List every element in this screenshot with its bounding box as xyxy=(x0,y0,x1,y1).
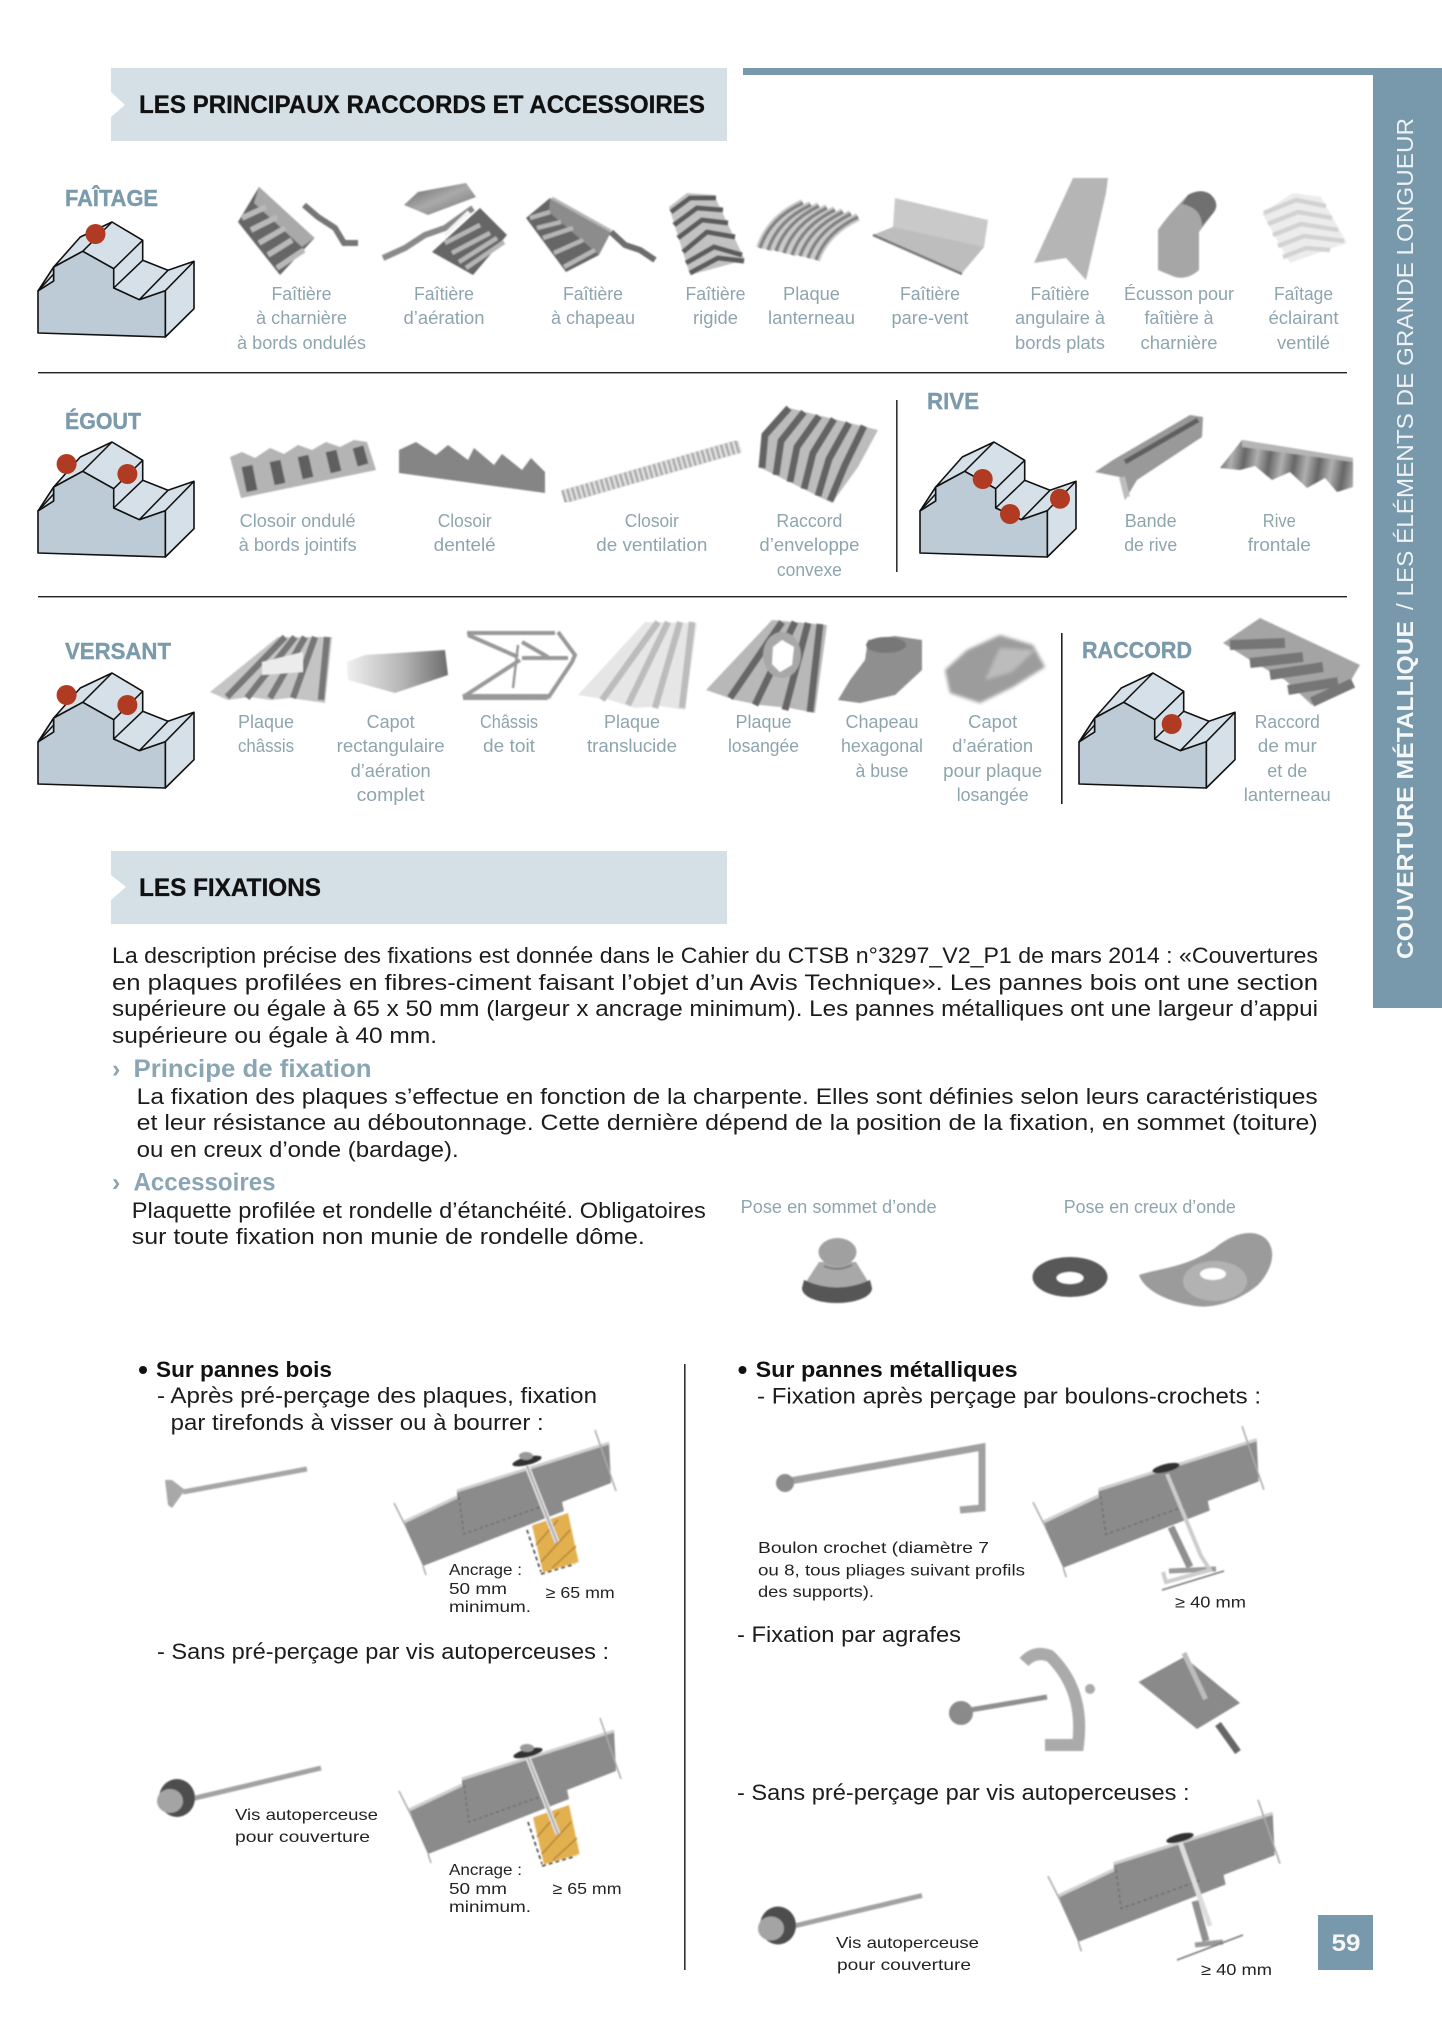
label: boulon crochet xyxy=(758,1540,1025,1601)
text block: introduction: La description précise des fixations est donnée dans le Cahier du CTSB n°3297_V2_P1 de mars 2014 : «Couvertures xyxy=(112,943,1318,968)
text: fixation après perçage: - Fixation après perçage par boulons-crochets : xyxy=(757,1384,1261,1408)
label: pose en creux d'onde: Pose en creux d’onde xyxy=(1064,1197,1236,1217)
label: faîtière pare-vent: Faîtière xyxy=(900,284,960,304)
label: faîtière pare-vent xyxy=(892,284,968,328)
icon: rondelle dôme xyxy=(802,1238,872,1303)
panel: versant xyxy=(38,620,1045,805)
label: closoir dentelé: Closoir xyxy=(438,511,492,531)
text block: accessoires: Plaquette profilée et rondelle d’étanchéité. Obligatoires xyxy=(132,1198,706,1223)
label: plaque lanterneau: lanterneau xyxy=(768,308,855,328)
diagram: faîtage location xyxy=(38,222,194,337)
icon: châssis de toit xyxy=(463,632,575,698)
label: chapeau hexagonal à buse: hexagonal xyxy=(841,736,923,756)
label: faîtière à charnière: Faîtière xyxy=(272,284,332,304)
icon: faîtière rigide xyxy=(669,193,745,275)
label: raccord de mur et de lanterneau: et de xyxy=(1267,761,1307,781)
label: bande de rive: Bande xyxy=(1125,511,1177,531)
label: faîtière à chapeau: Faîtière xyxy=(563,284,623,304)
side band with rotated chapter title xyxy=(1373,68,1442,1008)
text: sans pré-perçage: - Sans pré-perçage par vis autoperceuses : xyxy=(157,1639,609,1664)
label: plaque losangée xyxy=(728,712,799,756)
label: ancrage xyxy=(449,1562,531,1616)
diagram: raccord location xyxy=(1079,673,1235,788)
heading: sur pannes métalliques: Sur pannes métalliques xyxy=(756,1357,1018,1382)
label: rive frontale: frontale xyxy=(1248,535,1311,555)
icon: plaque châssis xyxy=(210,637,332,703)
label: raccord de mur et de lanterneau xyxy=(1244,712,1331,805)
label: écusson pour faîtière à charnière: Écusson pour xyxy=(1124,284,1234,304)
icon: tirefond xyxy=(165,1469,307,1508)
label: rive frontale: Rive xyxy=(1263,511,1296,531)
icon: plaque lanterneau xyxy=(760,203,858,260)
icon: agrafe courbe xyxy=(949,1654,1095,1745)
diagram: rive location xyxy=(920,442,1076,557)
icon: faîtière à charnière xyxy=(238,187,358,275)
label: closoir ondulé à bords jointifs: à bords jointifs xyxy=(239,535,357,555)
icon: rive frontale xyxy=(1220,440,1353,492)
icon: plaque losangée xyxy=(706,620,827,713)
panel: sur pannes bois xyxy=(139,1357,622,1916)
label: capot rectangulaire d'aération complet: rectangulaire xyxy=(337,736,445,756)
label: châssis de toit: Châssis xyxy=(480,712,538,732)
heading: raccord: RACCORD xyxy=(1082,637,1192,663)
label: faîtière angulaire à bords plats: bords plats xyxy=(1015,333,1105,353)
label: ancrage: 50 mm xyxy=(449,1881,507,1898)
label: vis autoperceuse: Vis autoperceuse xyxy=(836,1935,979,1952)
label: largeur 65 mm: ≥ 65 mm xyxy=(552,1881,622,1898)
diagram: fixation sur panne métallique avec crochet xyxy=(1033,1426,1264,1590)
label: chapeau hexagonal à buse: Chapeau xyxy=(846,712,918,732)
icon: capot d'aération pour plaque losangée xyxy=(945,635,1045,703)
label: écusson pour faîtière à charnière: faîtière à xyxy=(1144,308,1214,328)
page number: 59 xyxy=(1332,1930,1360,1957)
text block: introduction: supérieure ou égale à 65 x 50 mm (largeur x ancrage minimum). Les pannes métalliques ont une largeur d’appui xyxy=(112,996,1318,1021)
label: largeur 40 mm: ≥ 40 mm xyxy=(1175,1595,1246,1612)
label: capot rectangulaire d'aération complet: complet xyxy=(357,785,425,805)
panel: sur pannes métalliques xyxy=(737,1357,1280,1979)
text: après pré-perçage: - Après pré-perçage des plaques, fixation xyxy=(157,1383,597,1408)
icon: faîtage éclairant xyxy=(1262,193,1347,263)
label: faîtage éclairant ventilé: ventilé xyxy=(1277,333,1330,353)
label: plaque losangée: Plaque xyxy=(736,712,792,732)
heading: les fixations: LES FIXATIONS xyxy=(139,874,321,902)
text: fixation par agrafes: - Fixation par agrafes xyxy=(737,1622,961,1647)
label: bande de rive: de rive xyxy=(1124,535,1177,555)
text block: introduction: supérieure ou égale à 40 mm. xyxy=(112,1023,437,1048)
diagram: fixation sur panne bois avec tirefond xyxy=(394,1430,616,1575)
icon: bande de rive xyxy=(1095,415,1203,500)
label: ancrage: Ancrage : xyxy=(449,1562,522,1579)
text block: introduction xyxy=(112,943,1318,1048)
label: vis autoperceuse: Vis autoperceuse xyxy=(235,1807,378,1824)
label: faîtage éclairant ventilé xyxy=(1268,284,1338,353)
diagram: fixation sur panne bois avec vis xyxy=(399,1718,621,1866)
icon: agrafe sur profil xyxy=(1138,1653,1240,1752)
icon: faîtière d'aération xyxy=(383,183,507,275)
panel: égout xyxy=(38,407,878,580)
diagram: égout location xyxy=(38,442,194,557)
label: plaque lanterneau xyxy=(768,284,855,328)
label: closoir de ventilation: de ventilation xyxy=(596,535,707,555)
icon: chapeau hexagonal à buse xyxy=(838,636,922,703)
diagram: versant location xyxy=(38,673,194,788)
icon: plaquette profilée xyxy=(1139,1233,1272,1307)
label: faîtière à chapeau xyxy=(551,284,635,328)
icon: vis autoperceuse xyxy=(758,1896,922,1944)
label: châssis de toit: de toit xyxy=(483,736,535,756)
heading: faîtage: FAÎTAGE xyxy=(65,184,158,211)
label: raccord d'enveloppe convexe xyxy=(759,511,859,580)
icon: vis autoperceuse xyxy=(157,1768,321,1817)
label: raccord de mur et de lanterneau: Raccord xyxy=(1255,712,1320,732)
label: capot rectangulaire d'aération complet: Capot xyxy=(367,712,415,732)
text block: accessoires xyxy=(132,1198,706,1249)
heading: principe de fixation: Principe de fixation xyxy=(134,1055,372,1083)
icon: closoir de ventilation xyxy=(563,446,740,497)
label: ancrage: Ancrage : xyxy=(449,1862,522,1879)
text block: principe de fixation: ou en creux d’onde (bardage). xyxy=(137,1137,459,1162)
label: capot d'aération pour plaque losangée xyxy=(943,712,1042,805)
label: largeur 65 mm: ≥ 65 mm xyxy=(546,1585,615,1602)
icon: faîtière angulaire xyxy=(1034,178,1108,280)
label: boulon crochet: Boulon crochet (diamètre 7 xyxy=(758,1540,989,1557)
label: pose en sommet d'onde: Pose en sommet d’onde xyxy=(741,1197,937,1217)
label: chapeau hexagonal à buse: à buse xyxy=(856,761,908,781)
label: faîtière angulaire à bords plats xyxy=(1015,284,1106,353)
label: écusson pour faîtière à charnière xyxy=(1124,284,1234,353)
label: faîtière d'aération: d’aération xyxy=(404,308,484,328)
label: closoir dentelé: dentelé xyxy=(434,535,496,555)
label: vis autoperceuse: pour couverture xyxy=(235,1829,370,1846)
heading: rive: RIVE xyxy=(927,388,979,414)
text block: introduction: en plaques profilées en fibres-ciment faisant l’objet d’un Avis Technique». Les pannes bois ont une section xyxy=(112,970,1318,995)
icon: closoir dentelé xyxy=(399,442,545,493)
icon: capot rectangulaire xyxy=(347,650,448,693)
label: closoir ondulé à bords jointifs xyxy=(239,511,357,555)
icon: raccord de mur et de lanterneau xyxy=(1223,618,1360,705)
label: vis autoperceuse: pour couverture xyxy=(837,1957,971,1974)
label: raccord de mur et de lanterneau: de mur xyxy=(1258,736,1317,756)
icon: faîtière pare-vent xyxy=(873,198,988,274)
label: chapeau hexagonal à buse xyxy=(841,712,923,781)
label: raccord d'enveloppe convexe: Raccord xyxy=(776,511,842,531)
label: capot d'aération pour plaque losangée: d’aération xyxy=(952,736,1033,756)
icon: faîtière à chapeau xyxy=(526,198,655,272)
icon: plaque translucide xyxy=(578,622,697,710)
label: largeur 40 mm: ≥ 40 mm xyxy=(1201,1962,1272,1979)
label: faîtière à chapeau: à chapeau xyxy=(551,308,635,328)
label: plaque translucide xyxy=(587,712,677,756)
label: boulon crochet: des supports). xyxy=(758,1584,874,1601)
label: faîtière rigide xyxy=(686,284,746,328)
label: faîtière à charnière: à bords ondulés xyxy=(237,333,366,353)
label: capot rectangulaire d'aération complet: d’aération xyxy=(351,761,431,781)
icon: closoir ondulé xyxy=(230,440,376,498)
label: capot rectangulaire d'aération complet xyxy=(337,712,445,805)
label: capot d'aération pour plaque losangée: losangée xyxy=(957,785,1029,805)
panel: rive xyxy=(920,388,1353,557)
label: faîtage éclairant ventilé: Faîtage xyxy=(1274,284,1333,304)
text: sans pré-perçage: - Sans pré-perçage par vis autoperceuses : xyxy=(737,1780,1190,1805)
label: ancrage: minimum. xyxy=(449,1899,531,1916)
label: bande de rive xyxy=(1124,511,1177,555)
label: closoir ondulé à bords jointifs: Closoir ondulé xyxy=(240,511,356,531)
side band with rotated chapter title: / LES ÉLÉMENTS DE GRANDE LONGUEUR xyxy=(1392,118,1418,610)
label: raccord d'enveloppe convexe: d’enveloppe xyxy=(759,535,859,555)
label: boulon crochet: ou 8, tous pliages suivant profils xyxy=(758,1563,1025,1580)
label: faîtière rigide: rigide xyxy=(693,308,738,328)
label: plaque lanterneau: Plaque xyxy=(783,284,840,304)
label: écusson pour faîtière à charnière: charnière xyxy=(1140,333,1218,353)
text block: principe de fixation: La fixation des plaques s’effectue en fonction de la charpente. Elles sont définies selon leurs caractéristiques xyxy=(137,1084,1318,1109)
icon: boulon crochet xyxy=(776,1447,982,1510)
label: plaque châssis xyxy=(238,712,294,756)
label: raccord d'enveloppe convexe: convexe xyxy=(777,560,842,580)
label: ancrage: 50 mm xyxy=(449,1581,507,1598)
page number xyxy=(1318,1915,1373,1970)
label: capot d'aération pour plaque losangée: Capot xyxy=(968,712,1017,732)
label: vis autoperceuse xyxy=(836,1935,979,1974)
heading: les principaux raccords et accessoires xyxy=(111,68,727,141)
label: faîtière pare-vent: pare-vent xyxy=(892,308,968,328)
label: plaque châssis: Plaque xyxy=(238,712,294,732)
label: châssis de toit xyxy=(480,712,538,756)
label: faîtière rigide: Faîtière xyxy=(686,284,746,304)
label: rive frontale xyxy=(1248,511,1311,555)
label: closoir de ventilation: Closoir xyxy=(625,511,679,531)
label: closoir dentelé xyxy=(434,511,496,555)
label: closoir de ventilation xyxy=(596,511,707,555)
label: faîtière angulaire à bords plats: Faîtière xyxy=(1030,284,1090,304)
label: capot d'aération pour plaque losangée: pour plaque xyxy=(943,761,1042,781)
text: après pré-perçage xyxy=(157,1383,597,1435)
label: faîtière angulaire à bords plats: angulaire à xyxy=(1015,308,1106,328)
label: ancrage: minimum. xyxy=(449,1599,531,1616)
label: faîtage éclairant ventilé: éclairant xyxy=(1268,308,1338,328)
label: plaque translucide: translucide xyxy=(587,736,677,756)
heading: principe de fixation: › xyxy=(112,1055,120,1083)
text block: principe de fixation xyxy=(137,1084,1318,1162)
panel: raccord xyxy=(1079,618,1360,805)
text block: principe de fixation: et leur résistance au déboutonnage. Cette dernière dépend de la position de la fixation, en sommet (toiture) xyxy=(137,1110,1318,1135)
icon: rondelle plate xyxy=(1032,1257,1108,1297)
label: faîtière d'aération: Faîtière xyxy=(414,284,474,304)
heading: versant: VERSANT xyxy=(65,638,171,664)
label: raccord de mur et de lanterneau: lanterneau xyxy=(1244,785,1331,805)
heading: accessoires: Accessoires xyxy=(134,1168,276,1196)
heading: accessoires: › xyxy=(112,1168,120,1196)
side band with rotated chapter title: COUVERTURE MÉTALLIQUE xyxy=(1391,621,1418,959)
label: plaque losangée: losangée xyxy=(728,736,799,756)
top rule xyxy=(743,68,1374,75)
text: après pré-perçage: par tirefonds à visser ou à bourrer : xyxy=(171,1410,544,1435)
label: faîtière à charnière xyxy=(237,284,366,353)
heading: les principaux raccords et accessoires: LES PRINCIPAUX RACCORDS ET ACCESSOIRES xyxy=(139,91,705,119)
label: faîtière d'aération xyxy=(404,284,484,328)
label: plaque translucide: Plaque xyxy=(604,712,660,732)
heading: égout: ÉGOUT xyxy=(65,407,141,434)
icon: raccord d'enveloppe convexe xyxy=(761,408,878,503)
label: plaque châssis: châssis xyxy=(238,736,294,756)
label: faîtière à charnière: à charnière xyxy=(256,308,347,328)
label: ancrage xyxy=(449,1862,531,1916)
text block: accessoires: sur toute fixation non munie de rondelle dôme. xyxy=(132,1224,645,1249)
panel: faîtage xyxy=(38,178,1347,353)
diagram: fixation sur panne métallique avec vis xyxy=(1048,1800,1280,1960)
heading: les fixations xyxy=(111,851,727,924)
heading: sur pannes bois: Sur pannes bois xyxy=(156,1357,332,1382)
icon: écusson xyxy=(1158,191,1216,278)
label: vis autoperceuse xyxy=(235,1807,378,1846)
